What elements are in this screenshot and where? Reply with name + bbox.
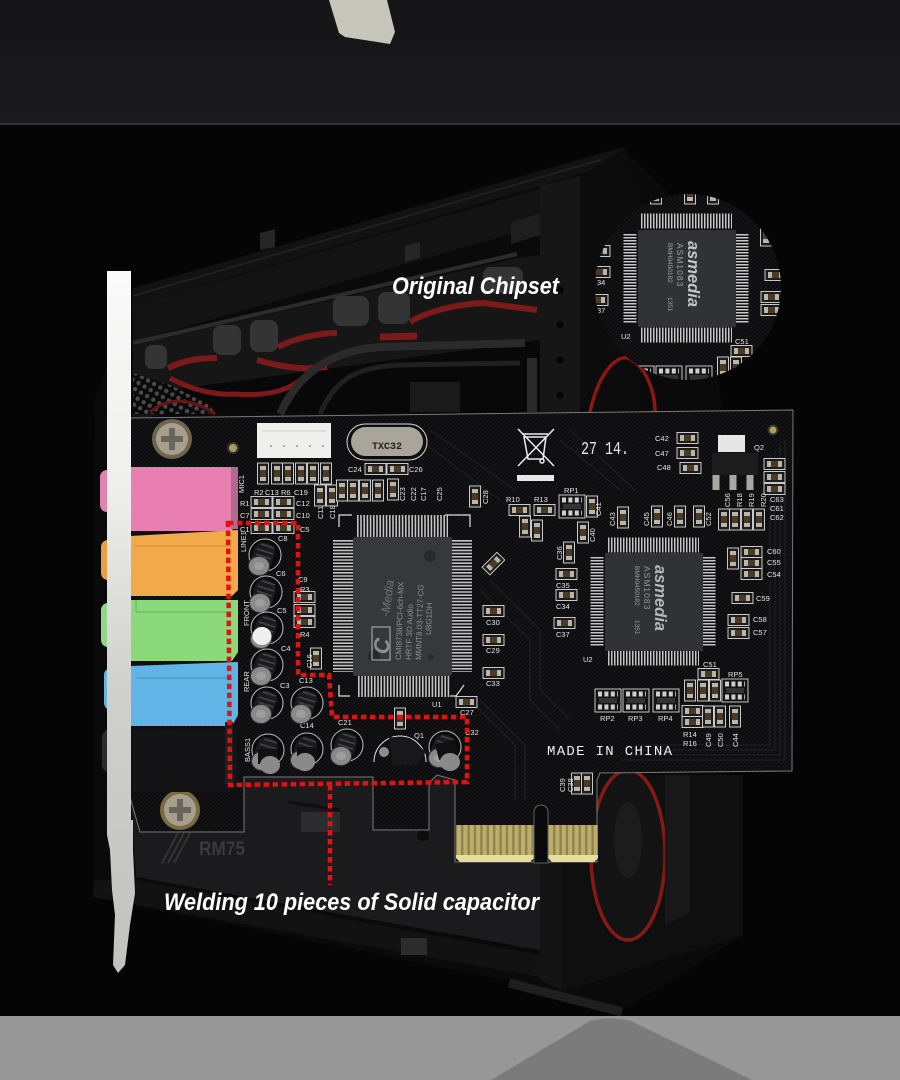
silkscreen labels: R4: [300, 630, 310, 639]
silkscreen labels: C38: [566, 778, 575, 792]
silkscreen labels: C63: [770, 495, 784, 504]
silkscreen labels: C26: [409, 465, 423, 474]
silkscreen labels: C14: [300, 721, 314, 730]
silkscreen labels: C18: [328, 505, 337, 519]
silkscreen labels: U1: [432, 700, 442, 709]
silkscreen labels: C35: [556, 581, 570, 590]
callout: magnified chipset lens: 1351: [666, 297, 673, 312]
icon: crossed-out bin symbol: [517, 429, 554, 481]
silkscreen labels: C33: [486, 679, 500, 688]
silkscreen labels: C56: [723, 493, 732, 507]
gold edge connector: [456, 805, 598, 863]
solid capacitors: [248, 539, 461, 774]
voltage regulator Q2: [712, 435, 758, 490]
silkscreen labels: C6: [276, 569, 286, 578]
PCB board outline: [128, 410, 793, 862]
callout: magnified chipset lens: BMH0450182: [666, 243, 673, 283]
callout: magnified chipset lens: 37: [597, 306, 605, 315]
silkscreen labels: C41: [594, 502, 603, 516]
silkscreen labels: C22: [409, 487, 418, 501]
mounting screw top: [152, 419, 192, 459]
black cables inside the case: [280, 343, 525, 414]
silkscreen labels: C58: [753, 615, 767, 624]
silkscreen labels: R6: [281, 488, 291, 497]
silkscreen labels: C24: [348, 465, 362, 474]
silkscreen labels: RP1: [564, 486, 579, 495]
panel: PC case photo in background: [93, 147, 743, 1012]
silkscreen labels: C3: [280, 681, 290, 690]
panel: top dark band: [0, 0, 900, 125]
silkscreen labels: C27: [460, 708, 474, 717]
silkscreen labels: C43: [608, 512, 617, 526]
made in China print: MADE IN CHINA: [547, 744, 673, 760]
silkscreen labels: C4: [281, 644, 291, 653]
panel: PCB sound card: [100, 410, 793, 863]
cable braid: [133, 373, 215, 414]
crystal oscillator: TXC32: [372, 442, 402, 453]
silkscreen labels: C37: [556, 630, 570, 639]
silkscreen labels: C57: [753, 628, 767, 637]
C-Media logo on chip: [368, 579, 397, 660]
silkscreen labels: R3: [300, 585, 310, 594]
silkscreen labels: C54: [767, 570, 781, 579]
silkscreen labels: RP5: [728, 670, 743, 679]
grey cable clips: [145, 267, 523, 369]
silkscreen labels: LINE1: [239, 531, 248, 552]
silkscreen labels: R13: [534, 495, 548, 504]
silkscreen labels: C8: [278, 534, 288, 543]
callout: magnified chipset lens: [595, 194, 781, 380]
silkscreen labels: RP4: [658, 714, 673, 723]
chip markings: HRTF 3D Audio: [404, 603, 415, 660]
main audio chip CMI8738: [339, 515, 470, 696]
silkscreen labels: C23: [398, 487, 407, 501]
silkscreen labels: C29: [486, 646, 500, 655]
silkscreen labels: C34: [556, 602, 570, 611]
silkscreen labels: RP3: [628, 714, 643, 723]
silkscreen labels: MIC1: [237, 475, 246, 493]
PCB traces: [420, 430, 785, 800]
silkscreen labels: Q2: [754, 443, 764, 452]
silkscreen labels: C30: [486, 618, 500, 627]
chip markings: U8G1DH: [424, 602, 434, 635]
silkscreen labels: C13: [299, 676, 313, 685]
bridge chip ASM1083: BMH0450182: [633, 566, 640, 606]
silkscreen labels: C10: [296, 511, 310, 520]
audio jack: blue: [130, 662, 238, 726]
test pad right: [768, 426, 778, 434]
silkscreen labels: C49: [704, 733, 713, 747]
audio jack: pink MIC: [130, 467, 238, 531]
silkscreen labels: C52: [704, 512, 713, 526]
silkscreen labels: REAR: [242, 671, 251, 692]
audio connector side bulges: [100, 470, 118, 772]
transistor Q1: [374, 736, 426, 765]
callout: magnified chipset lens: C51: [735, 337, 749, 346]
silkscreen labels: C13: [265, 488, 279, 497]
heading: Original Chipset: Original Chipset: [392, 273, 560, 300]
audio jack: orange: [130, 530, 238, 596]
audio jack: black: [133, 722, 237, 792]
audio jack: green: [130, 600, 238, 661]
silkscreen labels: R1: [240, 499, 250, 508]
callout: magnified chipset lens: 34: [597, 278, 605, 287]
silkscreen labels: C36: [555, 546, 564, 560]
silkscreen labels: C42: [655, 434, 669, 443]
silkscreen labels: C45: [642, 512, 651, 526]
chip markings: MMNT8.03-TT27-CG: [414, 584, 426, 660]
bridge chip ASM1083: [597, 545, 709, 658]
silkscreen labels: [237, 434, 784, 792]
bridge chip ASM1083: asmedia: [651, 565, 670, 631]
test pad: [228, 443, 238, 453]
silkscreen labels: Q1: [414, 731, 424, 740]
SMD components: [251, 432, 785, 794]
silkscreen labels: C59: [756, 594, 770, 603]
silkscreen labels: C50: [716, 733, 725, 747]
mounting screw bottom: [160, 790, 200, 830]
white header connector: [257, 423, 331, 458]
silkscreen labels: C12: [296, 499, 310, 508]
panel: metal bracket: [107, 271, 135, 973]
silkscreen labels: R14: [683, 730, 697, 739]
silkscreen labels: R10: [506, 495, 520, 504]
callout: magnified chipset lens: ASM1083: [675, 243, 685, 287]
silkscreen labels: C5: [277, 606, 287, 615]
silkscreen labels: R19: [747, 493, 756, 507]
bridge chip ASM1083: ASM1083: [642, 566, 652, 610]
silkscreen labels: R20: [759, 493, 768, 507]
silkscreen labels: C55: [767, 558, 781, 567]
case label: RM75: [199, 839, 245, 860]
silkscreen labels: C32: [465, 728, 479, 737]
silkscreen labels: C7: [240, 511, 250, 520]
case silhouette in grey band: [491, 1018, 752, 1080]
silkscreen labels: C16: [305, 654, 314, 668]
silkscreen labels: C39: [558, 778, 567, 792]
lower case rail: [93, 880, 540, 977]
panel: bottom grey band: [0, 1016, 900, 1080]
silkscreen labels: R18: [735, 493, 744, 507]
silkscreen labels: C47: [655, 449, 669, 458]
date code: 27 14.: [581, 440, 629, 460]
silkscreen labels: U2: [583, 655, 593, 664]
silkscreen labels: C46: [665, 512, 674, 526]
callout: magnified chipset lens: U2: [621, 332, 631, 341]
lower fan with red ring: [561, 770, 743, 992]
C-Media logo on chip: -Media: [378, 579, 397, 617]
callout: magnified chipset lens: asmedia: [684, 241, 703, 307]
silkscreen labels: C21: [338, 718, 352, 727]
red cable behind the lens: [590, 358, 655, 412]
silkscreen labels: C62: [770, 513, 784, 522]
C-Media logo on chip: C: [368, 635, 395, 656]
chip markings: [394, 581, 434, 660]
silkscreen labels: C11: [316, 506, 325, 519]
bridge chip ASM1083: 1351: [633, 620, 640, 635]
silkscreen labels: C60: [767, 547, 781, 556]
silkscreen labels: BASS1: [243, 738, 252, 762]
icon: silver bracket tip cropped from previous section: [329, 0, 395, 44]
heading: Welding 10 pieces of Solid capacitor: Welding 10 pieces of Solid capacitor: [164, 889, 540, 916]
crystal oscillator: [347, 424, 427, 460]
silkscreen labels: C51: [703, 660, 717, 669]
silkscreen labels: C44: [731, 733, 740, 747]
power supply panel: [130, 770, 540, 950]
callout: red dotted outline around capacitors: [228, 523, 467, 885]
silkscreen labels: C48: [657, 463, 671, 472]
red wires inside the case: [168, 303, 537, 395]
silkscreen labels: C28: [481, 490, 490, 504]
silkscreen labels: C19: [294, 488, 308, 497]
silkscreen labels: C61: [770, 504, 784, 513]
silkscreen labels: FRONT: [242, 600, 251, 626]
silkscreen labels: C9: [298, 575, 308, 584]
silkscreen labels: C25: [435, 487, 444, 501]
silkscreen labels: R16: [683, 739, 697, 748]
silkscreen labels: C5: [300, 525, 310, 534]
silkscreen labels: C17: [419, 487, 428, 501]
chip markings: CMI8738/PCI-6ch-MX: [394, 581, 406, 660]
silkscreen labels: C40: [588, 528, 597, 542]
red wire near braid: [150, 401, 215, 414]
silkscreen labels: R2: [254, 488, 264, 497]
silkscreen labels: RP2: [600, 714, 615, 723]
silkscreen labels: C1: [240, 525, 250, 534]
